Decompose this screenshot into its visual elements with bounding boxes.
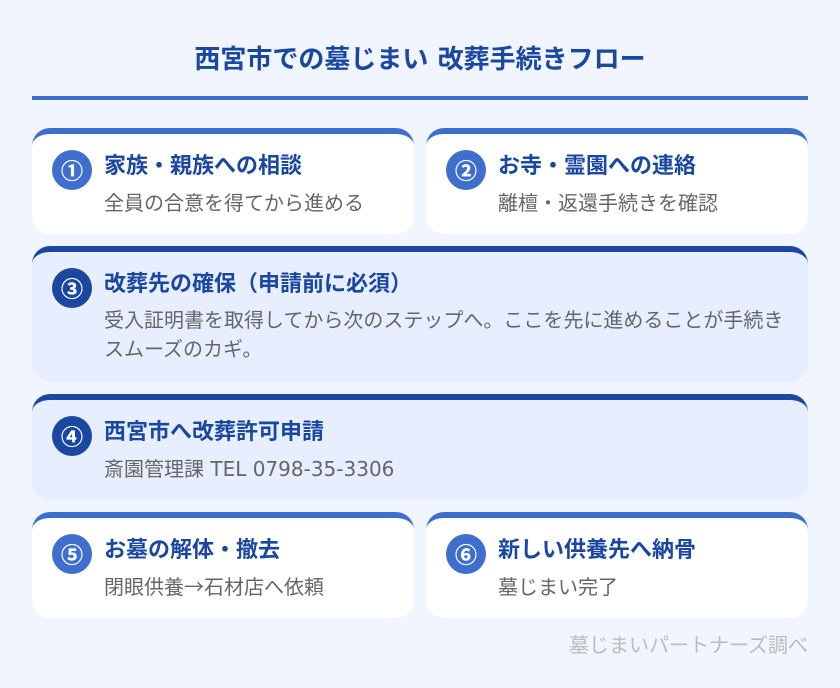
panel: step 5 xyxy=(32,512,414,618)
step 3 number badge xyxy=(52,268,92,308)
panel: step 1 xyxy=(32,128,414,234)
step 4 number badge: ④ xyxy=(61,420,83,452)
step 4 number badge xyxy=(52,416,92,456)
step 5 number badge xyxy=(52,534,92,574)
step 1 number badge: ① xyxy=(61,154,83,186)
title underline xyxy=(32,96,808,100)
step 2 heading: お寺・霊園への連絡 xyxy=(498,153,696,178)
step 6 heading: 新しい供養先へ納骨 xyxy=(498,537,696,562)
step 6 description: 墓じまい完了 xyxy=(498,577,618,599)
title: 西宮市での墓じまい 改葬手続きフロー xyxy=(194,44,646,74)
step 1 number badge xyxy=(52,150,92,190)
step 4 heading: 西宮市へ改葬許可申請 xyxy=(104,419,324,444)
step 5 number badge: ⑤ xyxy=(61,538,83,570)
source note: 墓じまいパートナーズ調べ xyxy=(569,635,808,657)
step 4 description: 斎園管理課 TEL 0798-35-3306 xyxy=(104,457,394,481)
step 2 description: 離檀・返還手続きを確認 xyxy=(498,193,718,215)
panel: step 3 xyxy=(32,246,808,382)
step 6 number badge xyxy=(446,534,486,574)
step 3 number badge: ③ xyxy=(61,272,83,304)
panel: step 6 xyxy=(426,512,808,618)
step 5 description: 閉眼供養→石材店へ依頼 xyxy=(104,571,324,600)
step 1 heading: 家族・親族への相談 xyxy=(104,153,302,178)
step 6 number badge: ⑥ xyxy=(455,538,477,570)
step 2 number badge xyxy=(446,150,486,190)
step 3 heading: 改葬先の確保（申請前に必須） xyxy=(104,271,412,296)
step 1 description: 全員の合意を得てから進める xyxy=(104,193,364,215)
panel: step 2 xyxy=(426,128,808,234)
panel: step 4 xyxy=(32,394,808,500)
step 2 number badge: ② xyxy=(455,154,477,186)
step 5 heading: お墓の解体・撤去 xyxy=(104,537,280,562)
step 3 description: 受入証明書を取得してから次のステップへ。ここを先に進めることが手続きスムーズのカギ。 xyxy=(104,310,783,361)
